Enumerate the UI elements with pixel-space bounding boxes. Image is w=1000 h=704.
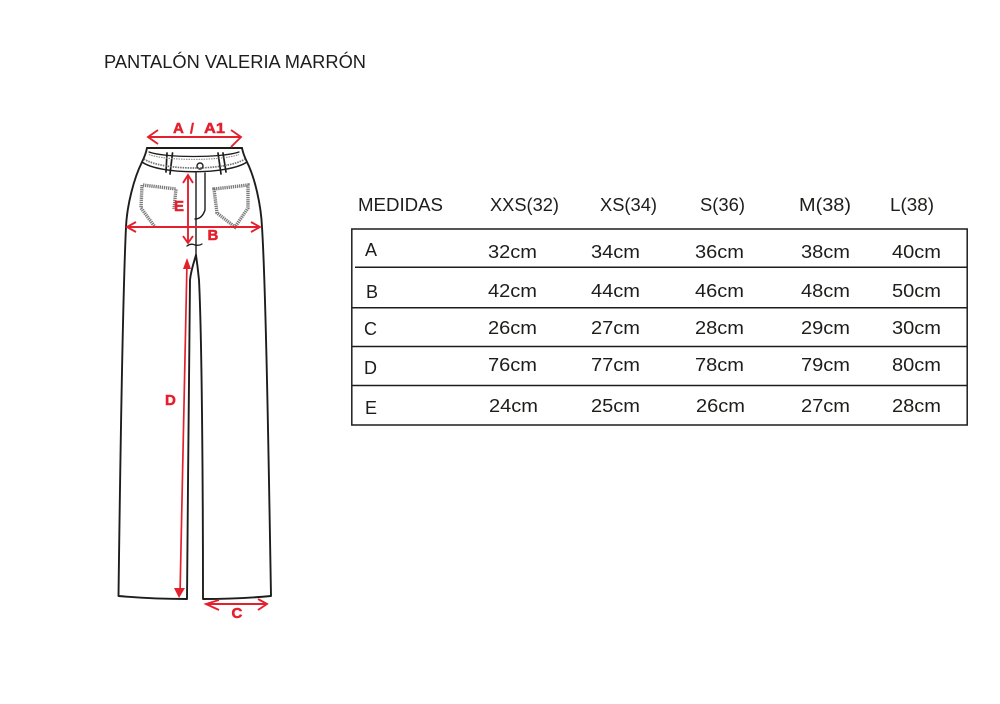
label: C: C (232, 605, 242, 622)
row E: 26cm (696, 396, 745, 416)
row C: 27cm (591, 318, 640, 338)
title: PANTALÓN VALERIA MARRÓN (104, 51, 366, 72)
table headers: S(36) (700, 195, 745, 215)
row A: 40cm (892, 242, 941, 262)
table headers: XS(34) (600, 195, 657, 215)
table headers: MEDIDAS (358, 195, 443, 215)
arrow: B (127, 222, 260, 232)
row D: 79cm (801, 355, 850, 375)
waistband stitching (144, 159, 245, 168)
table headers (358, 195, 934, 215)
label: A / A1: A1 (204, 120, 225, 137)
table grid (352, 229, 967, 425)
row E (365, 396, 941, 418)
row B: 44cm (591, 281, 640, 301)
arrow: C (206, 599, 267, 610)
arrow: D (174, 258, 191, 598)
row C: 30cm (892, 318, 941, 338)
label: E: E (174, 198, 184, 215)
label: A / A1 (173, 120, 225, 137)
row A: 32cm (488, 242, 537, 262)
row A: 38cm (801, 242, 850, 262)
table headers: L(38) (890, 195, 934, 215)
table headers: XXS(32) (490, 195, 559, 215)
technical drawing: jeans with measurements (118, 120, 271, 622)
arrow: E (183, 175, 193, 243)
row D: 78cm (695, 355, 744, 375)
pockets (141, 185, 248, 227)
row D: D (364, 358, 377, 378)
row B: B (366, 282, 378, 302)
row A (365, 240, 941, 262)
row E: 28cm (892, 396, 941, 416)
row E: 27cm (801, 396, 850, 416)
row B: 42cm (488, 281, 537, 301)
row C (364, 318, 941, 339)
row E: 24cm (489, 396, 538, 416)
row C: C (364, 319, 377, 339)
row B (366, 281, 941, 302)
row A: 36cm (695, 242, 744, 262)
row B: 46cm (695, 281, 744, 301)
row D: 77cm (591, 355, 640, 375)
arrow: A / A1 (148, 130, 241, 147)
row E: 25cm (591, 396, 640, 416)
row B: 48cm (801, 281, 850, 301)
row B: 50cm (892, 281, 941, 301)
row C: 28cm (695, 318, 744, 338)
measurements table (352, 229, 967, 425)
label: B: B (208, 227, 218, 244)
row E: E (365, 398, 377, 418)
table headers: M(38) (799, 195, 851, 215)
row D (364, 355, 941, 378)
row C: 26cm (488, 318, 537, 338)
row C: 29cm (801, 318, 850, 338)
jeans outline (118, 148, 271, 599)
row D: 76cm (488, 355, 537, 375)
row A: 34cm (591, 242, 640, 262)
label: D: D (165, 392, 176, 409)
label: A / A1: A (173, 120, 184, 137)
row D: 80cm (892, 355, 941, 375)
label: A / A1: / (190, 120, 194, 136)
row A: A (365, 240, 377, 260)
